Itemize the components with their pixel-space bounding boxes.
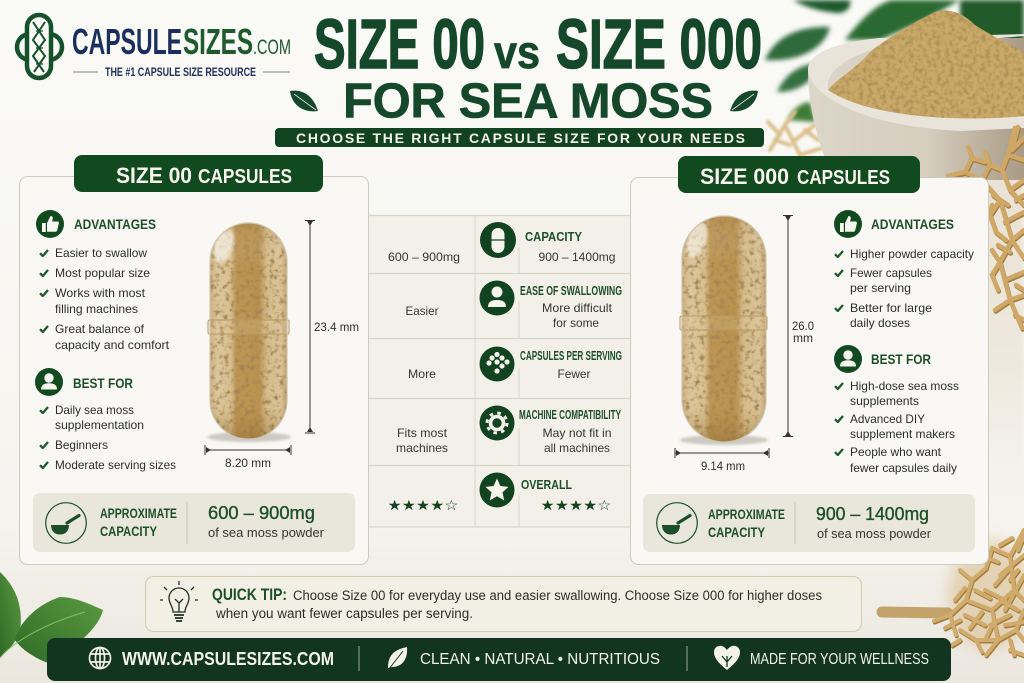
approximate capacity <box>643 494 975 552</box>
icon: left title leaf <box>290 91 318 111</box>
quick tip: Choose Size 00 for everyday use and easier swallowing. Choose Size 000 for higher doses <box>293 588 822 603</box>
footer bar: MADE FOR YOUR WELLNESS <box>750 651 929 668</box>
row: overall: OVERALL <box>521 477 572 492</box>
footer bar <box>47 638 951 681</box>
photo: sea moss branches, top right <box>948 127 1024 330</box>
best for heading <box>35 368 133 396</box>
advantages list: Higher powder capacity <box>850 247 974 261</box>
row: capsules per serving <box>408 346 622 382</box>
tagline: THE #1 CAPSULE SIZE RESOURCE <box>105 67 256 79</box>
row: ease of swallowing <box>406 280 622 330</box>
advantages heading: ADVANTAGES <box>871 216 954 232</box>
advantages list: Better for large <box>850 301 932 315</box>
advantages list: Great balance of <box>55 322 145 336</box>
panel header: CAPSULES <box>797 167 890 189</box>
comparison table <box>369 215 630 527</box>
dimension: height: 23.4 mm <box>314 322 359 334</box>
advantages list: per serving <box>850 281 911 295</box>
best for list: supplements <box>850 394 919 408</box>
row: capsules per serving: More <box>408 367 436 381</box>
best for list: supplement makers <box>850 427 955 441</box>
approximate capacity: APPROXIMATE <box>708 507 785 522</box>
best for list <box>835 379 959 475</box>
wordmark: SIZES <box>183 21 253 62</box>
advantages list: Fewer capsules <box>850 266 932 280</box>
advantages heading <box>834 210 954 238</box>
photo: sea moss, bottom right <box>882 530 1024 656</box>
best for list: High-dose sea moss <box>850 379 959 393</box>
row: machine compatibility: all machines <box>544 441 610 455</box>
row: ease of swallowing: for some <box>553 316 599 330</box>
best for heading: BEST FOR <box>871 351 931 367</box>
advantages list: filling machines <box>55 302 138 316</box>
dimension: height: 26.0 <box>792 321 814 333</box>
row: capacity <box>388 222 616 264</box>
advantages list: capacity and comfort <box>55 338 170 352</box>
row: capacity: CAPACITY <box>525 229 582 244</box>
capsule: size 000 <box>680 216 768 445</box>
footer bar: WWW.CAPSULESIZES.COM <box>122 649 334 669</box>
approximate capacity: CAPACITY <box>708 525 765 540</box>
advantages heading: ADVANTAGES <box>74 216 156 232</box>
advantages list: Most popular size <box>55 266 150 280</box>
quick tip <box>146 576 862 632</box>
advantages list <box>40 246 170 352</box>
dimension: width: 9.14 mm <box>701 461 745 473</box>
dimension: height <box>305 220 359 433</box>
icon: leaf <box>388 647 407 669</box>
approximate capacity: APPROXIMATE <box>100 506 177 521</box>
photo: sea moss powder bowl with leaves <box>765 0 1024 180</box>
photo: leaves, bottom left <box>0 572 103 663</box>
approximate capacity: 600 – 900mg <box>208 503 315 523</box>
approximate capacity: 900 – 1400mg <box>816 504 929 524</box>
icon: globe <box>90 648 110 668</box>
row: overall: ★★★★☆ <box>540 497 612 513</box>
best for heading <box>834 345 931 373</box>
logo <box>17 15 291 79</box>
title <box>314 5 762 128</box>
panel header <box>678 156 920 193</box>
subtitle banner: CHOOSE THE RIGHT CAPSULE SIZE FOR YOUR NEEDS <box>296 130 745 146</box>
row: overall: ★★★★☆ <box>388 497 458 513</box>
row: overall <box>388 472 612 513</box>
best for list: Advanced DIY <box>850 412 925 426</box>
best for heading: BEST FOR <box>73 375 133 391</box>
row: ease of swallowing: EASE OF SWALLOWING <box>520 284 622 298</box>
row: capsules per serving: CAPSULES PER SERVING <box>520 349 622 363</box>
panel header <box>74 155 323 192</box>
quick tip: when you want fewer capsules per serving. <box>215 606 473 621</box>
row: capacity: 900 – 1400mg <box>538 250 616 264</box>
best for list: Daily sea moss <box>55 403 134 417</box>
approximate capacity <box>33 493 355 552</box>
title: SIZE 000 <box>556 5 762 83</box>
row: machine compatibility: May not fit in <box>542 426 612 440</box>
row: machine compatibility: MACHINE COMPATIBILITY <box>519 408 621 422</box>
icon: heart <box>714 646 740 670</box>
blurred moss behind the bowl <box>768 112 822 155</box>
row: capsules per serving: Fewer <box>558 367 590 381</box>
best for list: Beginners <box>55 438 108 452</box>
best for list <box>40 403 176 472</box>
approximate capacity: of sea moss powder <box>208 526 324 540</box>
advantages list <box>835 247 974 330</box>
row: machine compatibility: machines <box>396 441 448 455</box>
approximate capacity: of sea moss powder <box>817 527 931 541</box>
title: vs <box>494 26 540 78</box>
title: SIZE 00 <box>314 5 485 83</box>
panel header: SIZE 00 <box>116 163 192 188</box>
approximate capacity: CAPACITY <box>100 524 157 539</box>
advantages list: Easier to swallow <box>55 246 147 260</box>
row: capacity: 600 – 900mg <box>388 250 460 264</box>
panel: size 000 <box>630 156 988 564</box>
photo: beige surface at right edge <box>975 120 1024 540</box>
row: ease of swallowing: Easier <box>406 304 439 318</box>
wordmark: CAPSULE <box>72 21 182 62</box>
best for list: supplementation <box>55 418 144 432</box>
advantages heading <box>36 210 156 238</box>
dimension: height: mm <box>793 333 813 345</box>
advantages list: Works with most <box>55 286 146 300</box>
wordmark: .COM <box>253 36 291 59</box>
quick tip: QUICK TIP: <box>212 586 287 604</box>
advantages list: daily doses <box>850 316 910 330</box>
icon: capsule DNA mark <box>17 15 62 78</box>
icon: light bulb <box>160 581 198 621</box>
dimension: width <box>205 445 291 470</box>
dimension: height <box>783 216 814 436</box>
icon: right title leaf <box>730 91 758 111</box>
best for list: Moderate serving sizes <box>55 458 176 472</box>
best for list: People who want <box>850 445 942 459</box>
row: machine compatibility: Fits most <box>397 426 448 440</box>
title: FOR SEA MOSS <box>343 74 713 128</box>
panel header: CAPSULES <box>198 166 292 188</box>
panel header: SIZE 000 <box>700 164 789 189</box>
row: ease of swallowing: More difficult <box>542 301 613 315</box>
dimension: width: 8.20 mm <box>225 458 271 470</box>
dimension: width <box>675 448 769 473</box>
best for list: fewer capsules daily <box>850 461 957 475</box>
footer bar: CLEAN • NATURAL • NUTRITIOUS <box>420 651 660 668</box>
row: machine compatibility <box>396 406 621 455</box>
panel: size 00 <box>20 155 368 564</box>
capsule: size 00 <box>207 223 291 442</box>
